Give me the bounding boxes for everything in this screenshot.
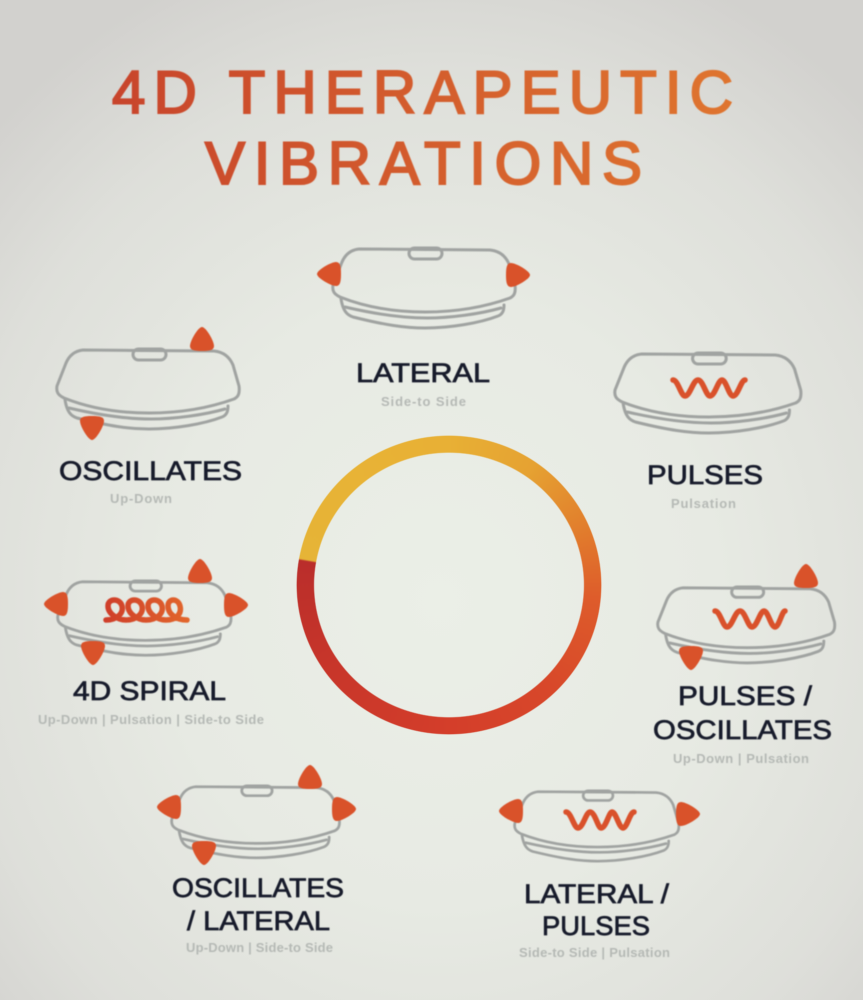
icon: pulses / oscillates device	[658, 564, 835, 670]
panel: lateral	[317, 248, 530, 409]
caption: lateral: Side-to Side	[381, 394, 466, 409]
icon: 4D spiral device	[44, 559, 248, 665]
icon: oscillates / lateral device	[157, 765, 356, 865]
title: VIBRATIONS	[205, 130, 642, 197]
icon: lateral / pulses device	[499, 791, 700, 861]
label: pulses: PULSES	[647, 460, 763, 490]
panel: pulses / oscillates	[653, 564, 835, 766]
icon: pulses device	[615, 353, 801, 433]
title	[112, 59, 733, 197]
caption: 4D spiral: Up-Down | Pulsation | Side-to Side	[38, 712, 264, 727]
caption: lateral / pulses: Side-to Side | Pulsation	[519, 945, 670, 960]
label: lateral: LATERAL	[356, 358, 490, 388]
label: lateral / pulses: PULSES	[542, 911, 650, 941]
panel: oscillates / lateral	[157, 765, 356, 955]
panel: 4D spiral	[38, 559, 264, 727]
caption: oscillates / lateral: Up-Down | Side-to Side	[186, 940, 333, 955]
label: oscillates / lateral	[172, 873, 344, 936]
label: oscillates / lateral: OSCILLATES	[172, 873, 344, 903]
ring: central gradient circle	[296, 435, 602, 735]
panel: lateral / pulses	[499, 791, 700, 960]
label: 4D spiral: 4D SPIRAL	[73, 676, 226, 706]
label: oscillates: OSCILLATES	[59, 456, 242, 486]
panel: pulses	[615, 353, 801, 511]
icon: oscillates device	[57, 327, 239, 440]
title: 4D THERAPEUTIC	[112, 59, 733, 126]
label: lateral / pulses: LATERAL /	[524, 879, 670, 909]
label: pulses / oscillates	[653, 681, 832, 745]
label: oscillates / lateral: / LATERAL	[187, 906, 330, 936]
label: pulses / oscillates: OSCILLATES	[653, 715, 832, 745]
caption: pulses: Pulsation	[671, 496, 736, 511]
label: pulses / oscillates: PULSES /	[678, 681, 813, 711]
panel: oscillates	[57, 327, 242, 506]
label: lateral / pulses	[524, 879, 670, 941]
caption: oscillates: Up-Down	[110, 491, 172, 506]
caption: pulses / oscillates: Up-Down | Pulsation	[673, 751, 809, 766]
icon: lateral device	[317, 248, 530, 328]
